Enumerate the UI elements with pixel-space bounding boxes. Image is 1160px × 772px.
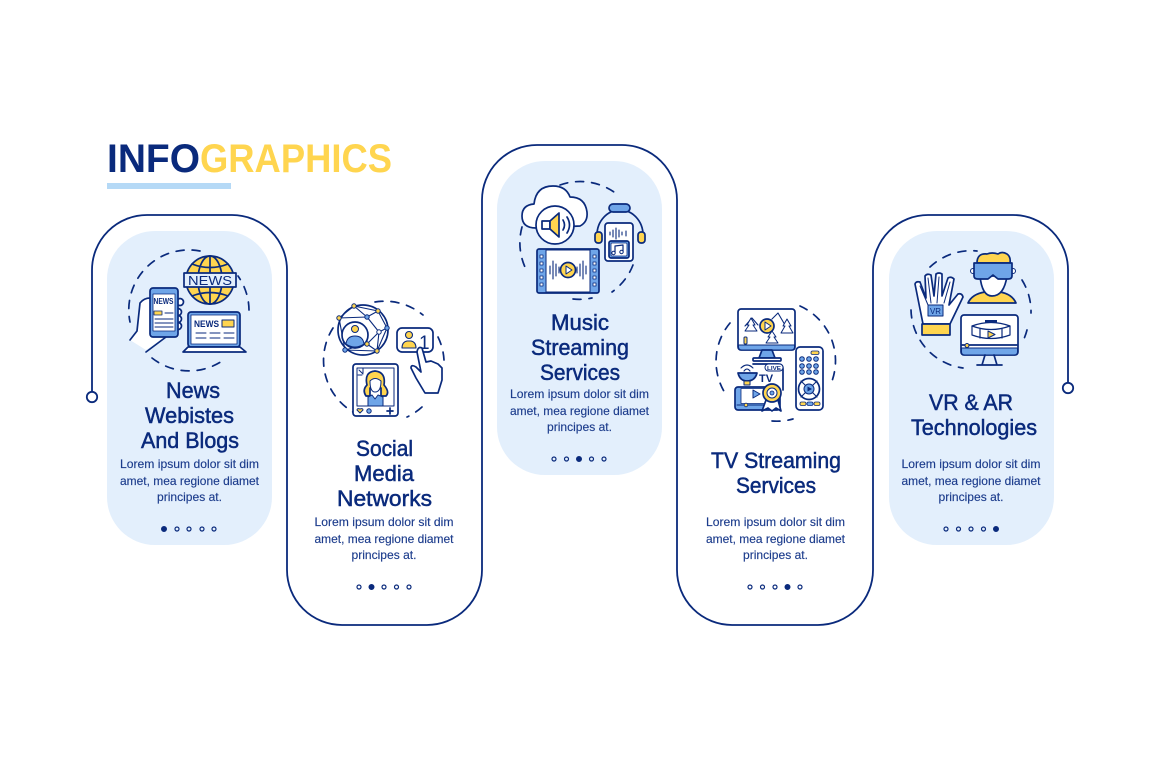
body text: amet, mea regione diamet <box>902 474 1041 488</box>
icon: social network <box>324 301 444 417</box>
icon: music streaming <box>520 182 645 299</box>
heading: Services <box>540 360 620 385</box>
title: INFO <box>107 137 200 181</box>
heading: Networks <box>337 486 432 511</box>
heading: Media <box>354 461 414 486</box>
connecting outline <box>87 145 1073 625</box>
heading: Webistes <box>145 403 234 428</box>
body text: principes at. <box>352 548 416 562</box>
heading: VR & AR <box>929 390 1013 415</box>
icon: news devices: NEWS <box>188 274 232 288</box>
heading: TV Streaming <box>711 448 841 473</box>
body text: Lorem ipsum dolor sit dim <box>706 515 845 529</box>
body text: Lorem ipsum dolor sit dim <box>314 515 454 529</box>
icon: news devices: NEWS <box>154 296 174 306</box>
icon: social network: 1 <box>419 333 430 354</box>
body text <box>120 457 260 504</box>
icon: virtual reality: VR <box>930 307 941 316</box>
body text: principes at. <box>743 548 808 562</box>
body text <box>902 457 1041 504</box>
title <box>107 137 392 189</box>
body text: principes at. <box>547 420 612 434</box>
panel: music streaming services <box>497 161 662 475</box>
heading <box>911 390 1037 440</box>
heading: Music <box>551 310 609 335</box>
heading: Services <box>736 473 816 498</box>
body text <box>510 387 650 434</box>
heading <box>141 378 239 453</box>
body text: Lorem ipsum dolor sit dim <box>510 387 649 401</box>
heading: And Blogs <box>141 428 239 453</box>
pagination dots <box>162 527 216 531</box>
body text: amet, mea regione diamet <box>120 474 260 488</box>
body text: amet, mea regione diamet <box>706 532 846 546</box>
body text: amet, mea regione diamet <box>510 404 650 418</box>
icon: tv streaming: TV <box>759 373 774 385</box>
pagination dots <box>748 585 802 589</box>
icon: virtual reality <box>911 251 1031 368</box>
pagination dots <box>357 585 411 589</box>
pagination dots <box>552 457 606 461</box>
heading <box>531 310 629 385</box>
body text: amet, mea regione diamet <box>314 532 454 546</box>
heading: News <box>166 378 220 403</box>
body text: principes at. <box>938 490 1004 504</box>
panel: tv streaming services <box>706 306 846 589</box>
body text: principes at. <box>157 490 222 504</box>
panel: vr and ar technologies <box>889 231 1054 545</box>
title: GRAPHICS <box>200 137 392 181</box>
heading: Social <box>356 436 413 461</box>
pagination dots <box>944 527 998 531</box>
panel: social media networks <box>314 301 454 589</box>
icon: tv streaming <box>716 306 836 421</box>
icon: news devices <box>129 250 249 371</box>
heading <box>711 448 841 498</box>
body text <box>314 515 454 562</box>
heading <box>337 436 432 511</box>
heading: Streaming <box>531 335 629 360</box>
body text: Lorem ipsum dolor sit dim <box>902 457 1040 471</box>
body text: Lorem ipsum dolor sit dim <box>120 457 259 471</box>
icon: tv streaming: LIVE <box>767 366 781 372</box>
body text <box>706 515 846 562</box>
icon: news devices: NEWS <box>194 319 219 329</box>
panel: news websites and blogs <box>107 231 272 545</box>
heading: Technologies <box>911 415 1037 440</box>
